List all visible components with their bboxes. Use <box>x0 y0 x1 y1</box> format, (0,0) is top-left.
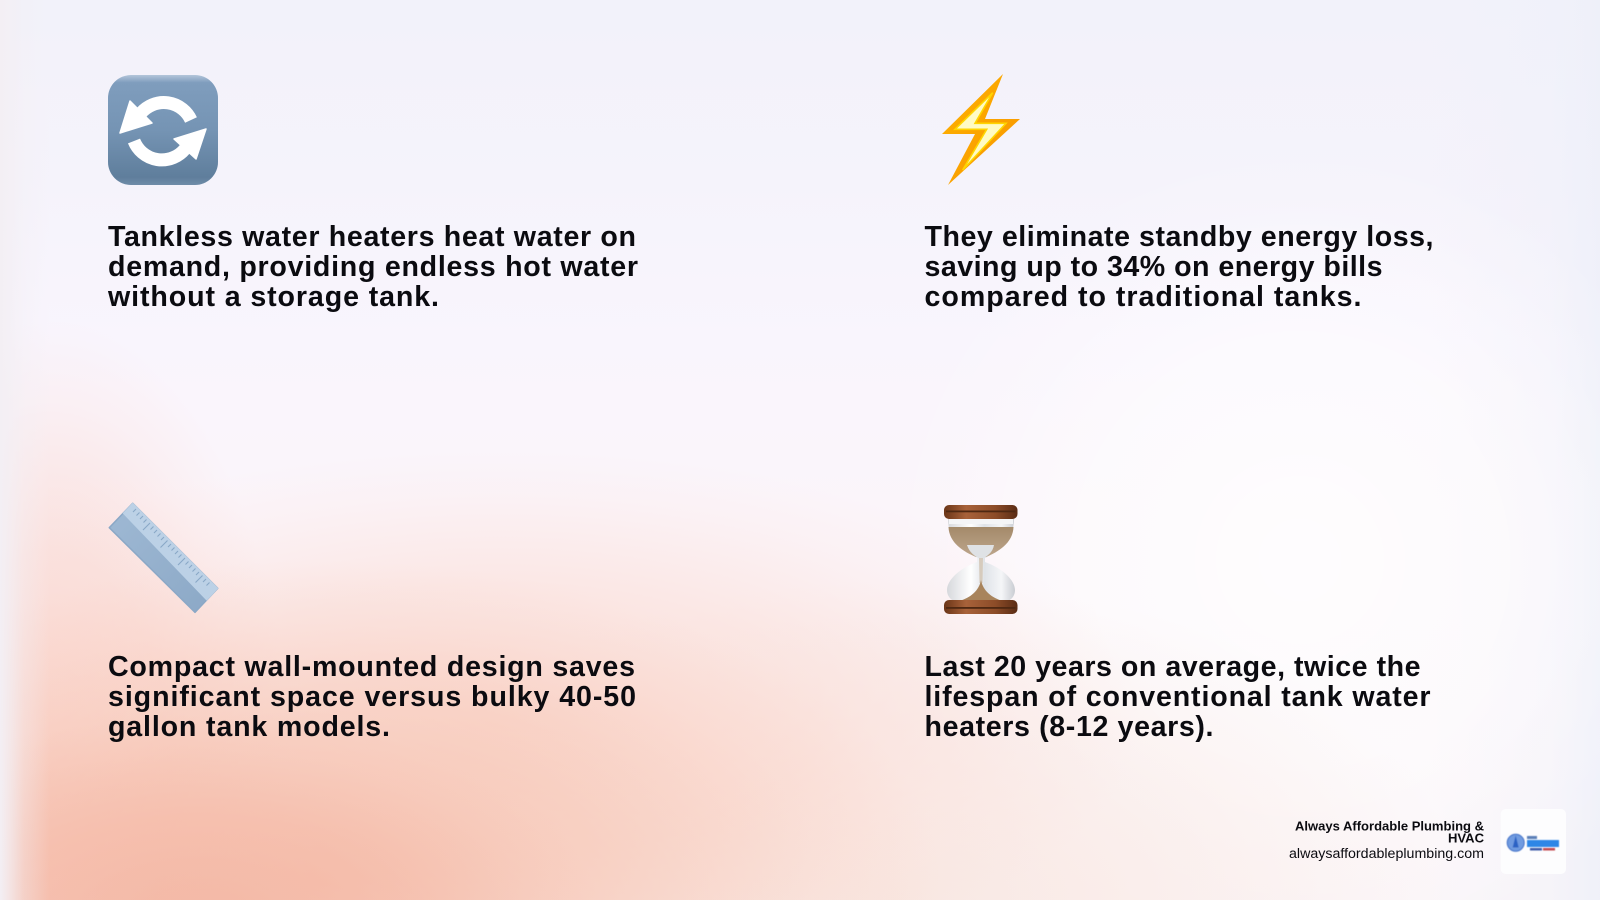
brand name and website: Always Affordable Plumbing & <box>1295 819 1484 834</box>
panel: compact design <box>108 503 636 743</box>
icon: hourglass <box>944 505 1018 614</box>
text: energy description: They eliminate standby energy loss, <box>924 221 1434 253</box>
footer: brand <box>1289 809 1566 874</box>
panel: energy savings <box>924 74 1434 313</box>
icon: lightning bolt <box>942 74 1020 185</box>
brand logo <box>1501 809 1566 874</box>
brand name and website: HVAC <box>1448 830 1485 845</box>
text: lifespan description: lifespan of conventional tank water <box>924 681 1430 713</box>
brand name and website <box>1289 819 1485 861</box>
panel: on-demand heating <box>107 75 638 313</box>
text: on-demand description: demand, providing endless hot water <box>108 251 638 283</box>
icon: ruler <box>109 503 218 612</box>
text: compact description: Compact wall-mounted design saves <box>108 651 635 683</box>
text: energy description: saving up to 34% on energy bills <box>924 251 1382 283</box>
text: energy description: compared to traditional tanks. <box>924 281 1362 313</box>
brand name and website: alwaysaffordableplumbing.com <box>1289 846 1484 861</box>
icon: refresh arrows <box>108 75 218 185</box>
text: lifespan description: heaters (8-12 years). <box>924 711 1214 743</box>
text: on-demand description: without a storage tank. <box>107 281 439 313</box>
text: energy description <box>924 221 1434 313</box>
text: lifespan description: Last 20 years on average, twice the <box>924 651 1420 683</box>
text: on-demand description: Tankless water heaters heat water on <box>108 221 636 253</box>
text: compact description: gallon tank models. <box>108 711 390 743</box>
panel: lifespan <box>924 505 1430 743</box>
text: compact description <box>108 651 636 743</box>
text: on-demand description <box>107 221 638 313</box>
text: lifespan description <box>924 651 1430 743</box>
text: compact description: significant space versus bulky 40-50 <box>108 681 636 713</box>
